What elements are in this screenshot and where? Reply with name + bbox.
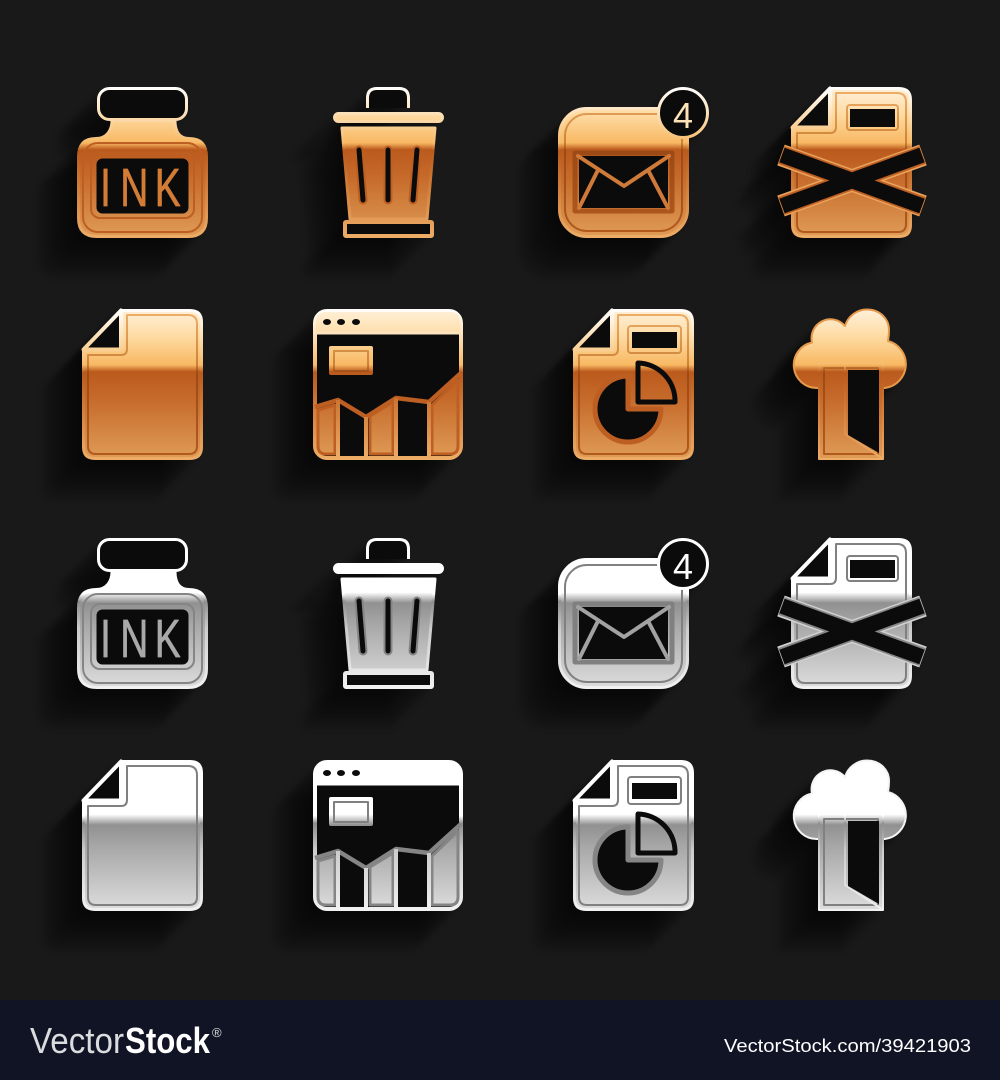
icon: gold document with pie chart: [574, 310, 692, 458]
gold second row: [84, 310, 906, 459]
icon: silver document with crossed tape: [781, 540, 923, 688]
icon: silver blank document: [84, 762, 202, 910]
icon: silver document with pie chart: [574, 762, 692, 910]
footer logo: [30, 1020, 222, 1061]
footer image id: VectorStock.com/39421903: [724, 1036, 971, 1056]
icon: gold cloud with door: [794, 310, 906, 459]
icon: gold mail with badge: 4: [673, 95, 693, 136]
icon: silver mail with badge: [560, 540, 708, 688]
silver icon set: [78, 540, 923, 910]
icon: gold mail with badge: [560, 88, 708, 236]
icon: silver ink bottle: [78, 540, 206, 688]
footer logo: ®: [212, 1025, 222, 1040]
icon: silver ink bottle: INK: [100, 608, 181, 668]
icon: gold ink bottle: [78, 88, 206, 236]
icon: gold blank document: [84, 310, 202, 458]
icon: gold trash can: [334, 88, 442, 236]
icon: silver trash can: [334, 540, 442, 687]
footer band: [0, 1000, 1000, 1080]
icon: silver mail with badge: 4: [673, 546, 693, 587]
icon: silver cloud with door: [794, 760, 906, 910]
gold icon set: [78, 88, 923, 459]
icon: silver browser chart window: [314, 762, 462, 909]
icon: gold ink bottle: INK: [100, 157, 181, 217]
icon: gold browser chart window: [314, 311, 462, 458]
footer logo: Vector: [30, 1020, 124, 1061]
icon: gold document with crossed tape: [781, 88, 923, 236]
silver second row: [84, 760, 906, 910]
footer logo: Stock: [125, 1020, 211, 1061]
